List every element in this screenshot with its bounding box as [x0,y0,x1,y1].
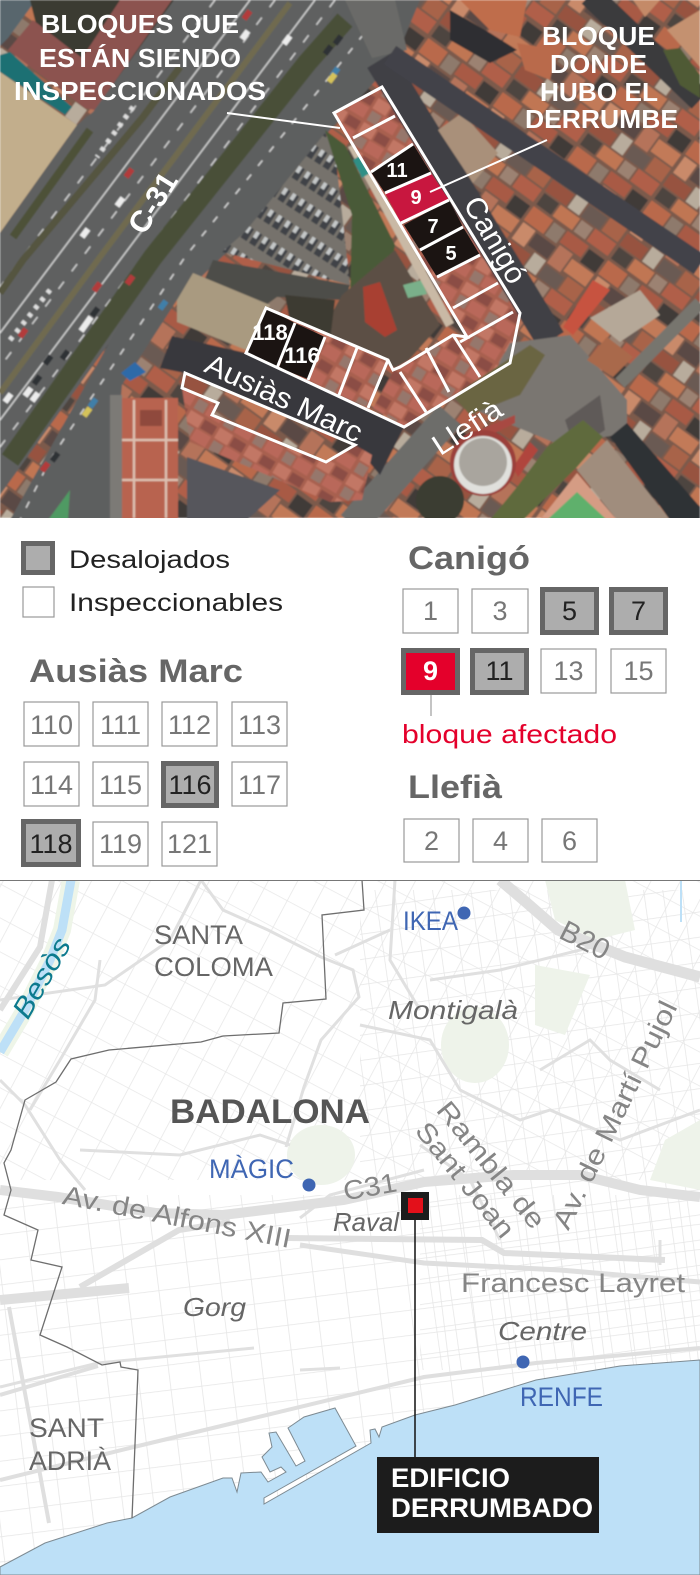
aerial photo panel [0,0,700,525]
address numbers: 117 [238,770,281,800]
address numbers: 118 [29,829,73,859]
road label Llefia: Llefià [427,393,509,462]
address numbers: 1 [423,596,438,626]
red roof east [563,280,610,335]
address numbers [423,596,654,686]
label: bloque del derrumbe: DERRUMBE [525,104,678,134]
highway lane lines [0,0,335,447]
label Av. de Marti Pujol: Av. de Martí Pujol [547,996,683,1234]
sports field [547,492,607,520]
legend text inspeccionables: Inspeccionables [69,589,283,617]
label Montigala: Montigalà [388,995,518,1025]
label Gorg: Gorg [183,1292,247,1322]
address numbers: 116 [168,770,212,800]
roofs base [0,0,700,518]
block numbers: 116 [284,343,320,368]
legend swatch inspeccionables [23,587,54,617]
parking lot [222,133,350,285]
heading Canigo: Canigó [408,540,530,576]
red lower-left buildings [122,398,178,520]
callout edificio derrumbado [377,1457,599,1533]
pointer line inspected [227,113,340,128]
label Santa Coloma: SANTA [154,920,243,950]
Canigo list [402,540,666,749]
garden trees [325,130,395,300]
map top rule [0,879,700,881]
street Canigo [380,60,551,340]
trees top right [663,48,700,98]
label Rambla de Sant Joan [409,1095,551,1244]
label Sant Adria: ADRIÀ [29,1446,111,1476]
street grid [0,880,700,1575]
label: bloques inspeccionados [14,9,266,106]
label: bloques inspeccionados: ESTÁN SIENDO [39,43,241,73]
address numbers: 114 [30,770,73,800]
lower asphalt [187,457,280,520]
green areas [287,880,700,1190]
teal strip [0,52,72,115]
label Magic: MÀGIC [209,1154,294,1184]
dark lot bottom [204,260,351,304]
building marker [401,1192,429,1220]
legend text desalojados: Desalojados [69,546,230,574]
service road [10,0,420,520]
address numbers: 110 [30,710,73,740]
tan big roof [577,440,670,520]
callout edificio derrumbado: DERRUMBADO [391,1493,593,1523]
label Sant Adria: SANT [29,1413,104,1443]
affected label: bloque afectado [402,719,617,749]
street Ausias Marc [160,336,404,475]
address numbers: 111 [100,710,141,740]
legend swatch desalojados [24,544,52,572]
address numbers: 121 [167,829,212,859]
Llefia list [404,769,597,862]
minor roads [0,880,700,1387]
address numbers: 112 [168,710,211,740]
label Av. de Alfons XIII: Av. de Alfons XIII [60,1180,294,1254]
address numbers: 11 [485,656,514,686]
address numbers: 2 [424,826,439,856]
address numbers: 5 [562,596,577,626]
bullring [450,415,538,496]
label B20: B20 [554,915,615,967]
dot Magic [302,1178,316,1192]
label IKEA: IKEA [403,906,458,936]
trees along Llefia [453,345,545,415]
beige roof top right [667,10,700,67]
boulevard Llefia [352,415,450,525]
plaza [475,335,627,445]
label: bloque del derrumbe [525,21,678,134]
label Rambla de Sant Joan: Sant Joan [409,1116,521,1244]
block numbers: 118 [252,320,288,345]
big orange roof east [587,337,633,377]
intersection grey [345,0,407,58]
street upper [390,55,700,265]
leader line [414,1218,416,1458]
affected block 9 [404,650,458,692]
label Santa Coloma [154,920,273,982]
label: bloques inspeccionados: BLOQUES QUE [41,9,239,39]
river Besos [0,880,681,1052]
block 7 [404,200,463,250]
block numbers: 9 [410,187,422,209]
label Raval: Raval [333,1207,400,1237]
highway [0,0,356,495]
label Badalona: BADALONA [170,1093,370,1131]
dark gap between roofs [30,0,174,78]
municipal boundary [4,880,364,1518]
dark street top right [590,0,700,100]
evacuated boxes [472,590,666,692]
lower strip buildings [182,388,372,502]
blue awning [121,362,146,381]
inspected-block outlines [182,87,520,462]
address numbers: 119 [99,829,142,859]
block 118 [246,308,295,368]
label: bloque del derrumbe: BLOQUE [542,21,655,51]
label C31: C31 [341,1168,399,1206]
Ausias Marc list [24,653,287,866]
sea and harbour [0,1360,700,1575]
legend panel [23,544,283,617]
brown roof building [8,0,172,110]
block numbers: 11 [386,160,408,182]
heading Ausias Marc: Ausiàs Marc [29,653,243,689]
chevrons [97,107,133,157]
label Sant Adria [29,1413,111,1476]
address numbers: 3 [492,596,508,626]
dark street lower right [610,423,700,520]
sidewalk strip [110,395,122,520]
trees south-east [490,420,603,520]
dot IKEA [458,906,470,920]
green court lower-left [48,490,70,520]
vehicles [5,11,341,471]
address numbers: 4 [493,826,508,856]
address numbers: 15 [623,656,654,686]
address numbers: 9 [423,656,438,686]
address numbers: 113 [238,710,281,740]
label: bloque del derrumbe: HUBO EL [540,77,658,107]
dot Renfe [516,1356,530,1368]
label Santa Coloma: COLOMA [154,952,273,982]
outer tree strip [13,130,90,237]
dark courtyard top [450,10,517,63]
block 5 [421,227,480,277]
address numbers [29,710,281,859]
inner tree strip [0,67,180,293]
address numbers [424,826,577,856]
address boxes [403,589,666,693]
block numbers [252,160,457,368]
label Francesc Layret: Francesc Layret [461,1268,686,1298]
connector to affected label [430,695,432,716]
green roof [403,280,427,298]
major roads [0,880,700,1523]
block 116 [279,323,325,379]
label: bloque del derrumbe: DONDE [550,49,647,79]
pointer line collapse [430,140,547,192]
road label Canigo: Canigó [457,191,533,290]
callout edificio derrumbado: EDIFICIO [391,1463,510,1493]
Ausias Marc building top-left [177,273,270,350]
median [0,3,290,393]
address numbers: 7 [631,596,646,626]
address boxes [24,702,287,866]
pink rim [540,473,617,520]
address numbers: 115 [99,770,142,800]
label Renfe: RENFE [520,1382,603,1412]
orange roofs top [460,0,527,37]
address numbers: 6 [562,826,577,856]
diagonal grey street [620,303,700,383]
label Rambla de Sant Joan: Rambla de [431,1095,551,1235]
evacuated boxes [24,764,216,864]
beige roof [0,72,77,233]
Canigo block rooftops [334,87,520,427]
block numbers: 5 [445,243,457,265]
address numbers: 13 [553,656,584,686]
light roofs east [590,290,660,342]
road label Ausias Marc: Ausiàs Marc [200,348,367,449]
address boxes [404,819,597,862]
locator map panel [0,880,700,1575]
label Centre: Centre [498,1316,587,1346]
road label C-31: C-31 [122,167,185,240]
plot between streets [438,113,498,183]
block numbers: 7 [427,216,439,238]
pale strip beside block [352,145,450,325]
roadside trees [10,20,345,460]
solar panels roof [0,0,32,46]
label Besos: Besòs [6,932,77,1024]
teal awning [353,155,370,178]
label: bloques inspeccionados: INSPECCIONADOS [14,76,266,106]
block 9 red [385,173,449,223]
heading Llefia: Llefià [408,769,502,805]
Ausias block rooftops [246,308,388,408]
red roofs left of block [363,282,397,337]
block 11 [371,144,431,193]
dark tree south [416,476,464,524]
